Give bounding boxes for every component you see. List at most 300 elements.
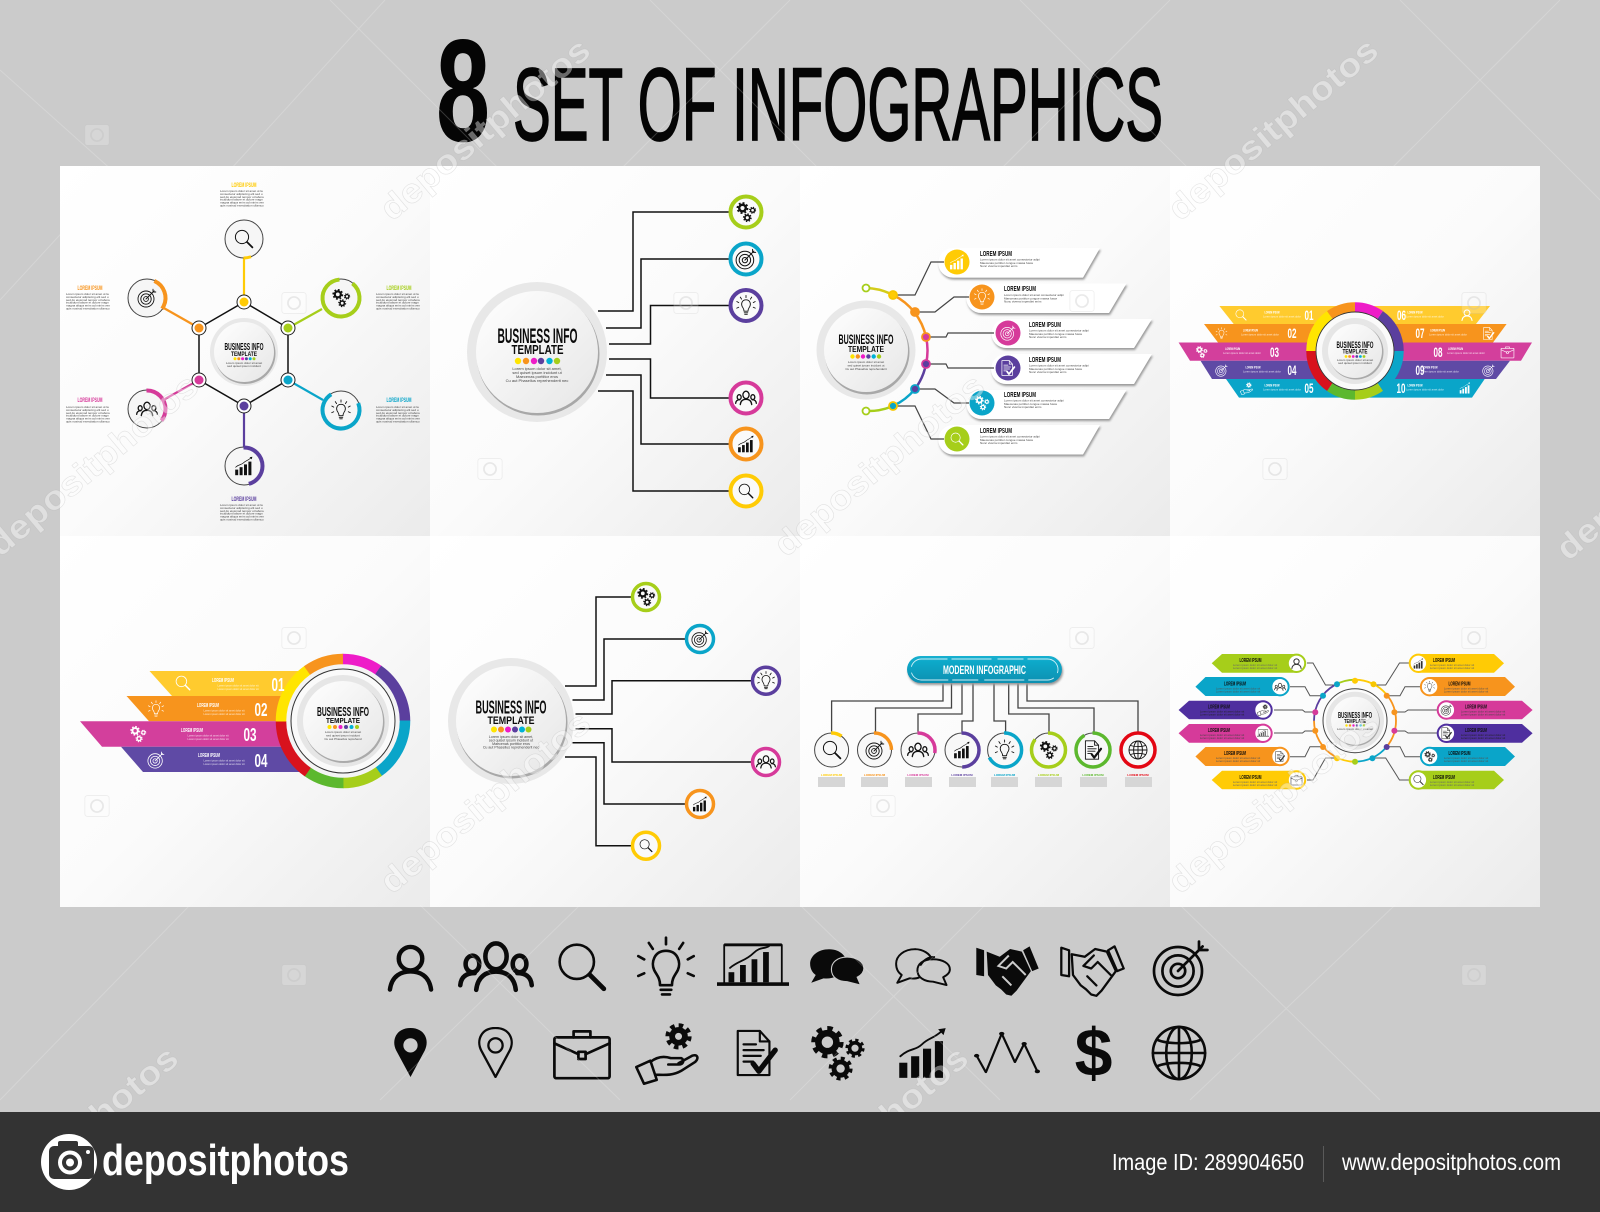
center ring: BUSINESS INFO (1338, 710, 1372, 720)
band numbers: 01 (1304, 307, 1314, 323)
icon: briefcase (554, 1031, 610, 1078)
node 8 globe: LOREM IPSUM (1127, 773, 1149, 777)
node 7 document (1076, 733, 1110, 787)
text block: top: magna aliqua enim ad minim ven (220, 201, 264, 205)
band captions: Lorem ipsum dolor sit amet dolor sit (217, 687, 259, 691)
band captions: Lorem ipsum dolor sit amet dolor (1223, 351, 1261, 355)
card 2 content: Nunc viverra imperdiet enim (1004, 300, 1042, 304)
left arrow 2 (1195, 677, 1289, 696)
card 4 content: Nunc viverra imperdiet enim (1029, 370, 1067, 374)
icon: bulb purple (730, 290, 762, 321)
colored bands (1179, 306, 1532, 398)
text block: lower right (376, 398, 420, 424)
band captions: Lorem ipsum dolor sit amet dolor sit (203, 708, 245, 712)
icon: document check (738, 1031, 775, 1075)
right arrow 2 (1421, 677, 1515, 696)
card 5 content: Lorem ipsum dolor sit amet consectetur adipi (1004, 398, 1064, 402)
text block: lower left: LOREM IPSUM (78, 398, 102, 404)
heading pill (907, 656, 1062, 683)
band labels: LOREM IPSUM (212, 678, 234, 684)
band labels: LOREM IPSUM (1264, 384, 1280, 388)
center ring: Lorem ipsum dolor sit amet (1337, 727, 1373, 731)
right arrow 4: Lorem ipsum dolor sit amet dolor sit (1461, 733, 1505, 737)
center badge: BUSINESS INFO (1336, 340, 1374, 351)
band labels: LOREM IPSUM (1422, 366, 1438, 370)
band numbers: 04 (254, 751, 268, 771)
card 5 content: Nunc viverra imperdiet enim (1004, 405, 1042, 409)
watermark overlay: depositphotos (373, 31, 598, 228)
icon: gears lime (730, 196, 762, 228)
node 4 chart (945, 733, 979, 787)
center badge: Cu aut Phasellus reprehend (324, 737, 362, 741)
left arrow 6: Lorem ipsum dolor sit amet dolor sit (1233, 780, 1277, 784)
card 6 content: LOREM IPSUM (980, 426, 1012, 435)
center badge: TEMPLATE (326, 716, 360, 725)
text block: bottom: quis nostrud exercitation ullamco (220, 518, 264, 522)
band numbers: 03 (1270, 344, 1279, 360)
title (436, 9, 1163, 172)
branch lines (832, 683, 1138, 732)
center badge: Lorem ipsum dolor sit amet (226, 361, 262, 365)
band captions: Lorem ipsum dolor sit amet dolor (1243, 370, 1281, 374)
text block: top: consectetur adipiscing elit sed u (220, 192, 263, 196)
band captions (187, 684, 259, 766)
card 2 content: Maecenas porttitor congue massa fusce (1004, 296, 1058, 300)
text block: upper right: Lorem ipsum dolor sit amet ut la (376, 292, 419, 296)
node 2 target (858, 733, 892, 787)
center badge: TEMPLATE (512, 343, 564, 357)
text block: bottom: magna aliqua enim ad minim ven (220, 515, 264, 519)
right arrow 4 (1438, 724, 1533, 743)
band captions: Lorem ipsum dolor sit amet dolor (1429, 332, 1467, 336)
node 2 target: LOREM IPSUM (864, 773, 886, 777)
center badge: sed quiset ipsum incidunt (227, 364, 261, 368)
text block: lower left: sed do eiusmod tempor ut labore (66, 411, 110, 415)
left arrow 4: Lorem ipsum dolor sit amet dolor sit (1200, 733, 1244, 737)
band captions: Lorem ipsum dolor sit amet dolor sit (203, 712, 245, 716)
center badge (448, 658, 574, 784)
card 4 content: Lorem ipsum dolor sit amet consectetur adipi (1029, 364, 1089, 368)
band icons (131, 676, 190, 768)
heading pill: MODERN INFOGRAPHIC (943, 663, 1026, 677)
center badge: TEMPLATE (231, 352, 257, 358)
left arrow 4: LOREM IPSUM (1208, 728, 1230, 734)
icon: gears lime (632, 584, 660, 610)
band numbers: 05 (1304, 380, 1314, 396)
band numbers (1270, 307, 1443, 396)
center badge: BUSINESS INFO (498, 325, 578, 348)
center badge: Maecenas porttitor eros (516, 374, 558, 379)
card 5 content: Maecenas porttitor congue massa fusce (1004, 402, 1058, 406)
watermark overlay: depositphotos (373, 704, 598, 901)
icon: handshake outline (1061, 946, 1124, 996)
band labels: LOREM IPSUM (1448, 347, 1463, 351)
panel backgrounds (60, 166, 1540, 907)
band numbers: 01 (272, 675, 284, 695)
node: people (128, 390, 166, 428)
node: target (122, 273, 172, 323)
hexagon nodes (192, 295, 295, 413)
text block: upper left (66, 286, 110, 310)
right arrow 6: Lorem ipsum dolor sit amet dolor sit (1430, 780, 1474, 784)
left arrow 5: LOREM IPSUM (1224, 751, 1246, 757)
left arrow 6 (1212, 771, 1305, 789)
right arrow 6: Lorem ipsum dolor sit amet dolor sit (1430, 783, 1474, 787)
text block: lower left: incididunt labore et dolore magn (66, 414, 109, 418)
panel: hexagon infographic (66, 183, 420, 522)
icon: search yellow (730, 476, 762, 506)
text block: bottom: consectetur adipiscing elit sed u (220, 506, 263, 510)
arc nodes (862, 284, 930, 414)
band captions: Lorem ipsum dolor sit amet dolor (1263, 314, 1301, 318)
left arrow 3: LOREM IPSUM (1208, 704, 1230, 710)
center ring: TEMPLATE (1344, 719, 1367, 725)
cards (938, 248, 1152, 454)
band captions: Lorem ipsum dolor sit amet dolor (1447, 351, 1485, 355)
node 6 gears (1032, 733, 1066, 787)
band labels: LOREM IPSUM (1408, 310, 1422, 314)
band numbers: 08 (1434, 344, 1443, 360)
icon: pin solid (394, 1028, 427, 1077)
watermark overlay: depositphotos (1161, 31, 1386, 228)
text block: bottom: sed do eiusmod tempor ut labore (220, 509, 264, 513)
right arrow 1: LOREM IPSUM (1433, 658, 1455, 664)
icon: bulb purple (752, 667, 780, 694)
band labels: LOREM IPSUM (197, 703, 219, 709)
card 1 content: LOREM IPSUM (980, 249, 1012, 258)
node 7 document: LOREM IPSUM (1082, 773, 1104, 777)
icon: target cyan (730, 244, 762, 274)
card 3 content: Maecenas porttitor congue massa fusce (1029, 332, 1083, 336)
band captions: Lorem ipsum dolor sit amet dolor (1406, 388, 1444, 392)
right arrow 3: Lorem ipsum dolor sit amet dolor sit (1461, 710, 1505, 714)
right arrow 3: LOREM IPSUM (1465, 704, 1487, 710)
right arrow 1 (1410, 654, 1504, 673)
band numbers: 10 (1396, 380, 1406, 396)
watermark overlay: depositphotos (1161, 704, 1386, 901)
left arrow 1: Lorem ipsum dolor sit amet dolor sit (1233, 663, 1277, 667)
segmented ring (1294, 290, 1416, 412)
text block: upper right: consectetur adipiscing elit sed u (376, 295, 419, 299)
text block: top: Lorem ipsum dolor sit amet ut la (220, 189, 263, 193)
text block: lower left: magna aliqua enim ad minim ven (66, 417, 110, 421)
panel: twelve arrows (1179, 654, 1533, 789)
node: search (220, 215, 268, 263)
left arrow 2: LOREM IPSUM (1224, 682, 1246, 688)
icon: target (1154, 942, 1207, 995)
band numbers: 07 (1416, 325, 1425, 341)
right arrow 3: Lorem ipsum dolor sit amet dolor sit (1461, 712, 1505, 716)
text block: upper left: incididunt labore et dolore magn (66, 301, 109, 305)
text block: upper right: sed do eiusmod tempor ut labore (376, 298, 420, 302)
center badge: Cu aut Phasellus reprehenderit nec (483, 746, 539, 750)
text block: lower right: LOREM IPSUM (386, 398, 412, 404)
branch lines (565, 597, 751, 846)
node 3 people (901, 733, 935, 787)
right arrow 5 (1421, 747, 1515, 766)
icon: chat solid (810, 949, 864, 985)
text block: lower left: quis nostrud exercitation ullamco (66, 420, 110, 424)
card 3 content: Nunc viverra imperdiet enim (1029, 335, 1067, 339)
text block: lower right: sed do eiusmod tempor ut labore (376, 411, 420, 415)
band numbers: 02 (1288, 325, 1297, 341)
center badge: sed quiset ipsum incidunt (326, 734, 360, 738)
text block: top: LOREM IPSUM (232, 183, 256, 189)
node: bulb (317, 386, 365, 434)
right arrow 1: Lorem ipsum dolor sit amet dolor sit (1430, 663, 1474, 667)
icon: globe (1153, 1027, 1205, 1079)
band captions: Lorem ipsum dolor sit amet dolor sit (203, 762, 245, 766)
band numbers: 06 (1397, 307, 1406, 323)
panel: six branch tree (467, 196, 762, 506)
segmented ring (257, 635, 429, 807)
icon: pin outline (479, 1028, 512, 1077)
image id: Image ID: 289904650 (1112, 1149, 1304, 1175)
logo mark (41, 1134, 97, 1190)
left arrow 2: Lorem ipsum dolor sit amet dolor sit (1216, 686, 1260, 690)
card 6 content: Nunc viverra imperdiet enim (980, 441, 1018, 445)
branch lines (598, 212, 729, 491)
left arrow 3 (1179, 701, 1272, 719)
text block: upper left: consectetur adipiscing elit sed u (66, 295, 109, 299)
text block: bottom: Lorem ipsum dolor sit amet ut la (220, 503, 263, 507)
right arrow 5: Lorem ipsum dolor sit amet dolor sit (1444, 756, 1488, 760)
center badge: Maecenas porttitor eros (492, 742, 530, 746)
center badge (1316, 312, 1394, 390)
center badge: sed quiset ipsum incidunt ut (847, 364, 885, 368)
band labels: LOREM IPSUM (1243, 328, 1258, 332)
text block: upper left: Lorem ipsum dolor sit amet ut la (66, 292, 109, 296)
center badge: sed quiset ipsum incidunt ut (512, 370, 563, 375)
band labels: LOREM IPSUM (1408, 384, 1422, 388)
text block: upper left: magna aliqua enim ad minim ven (66, 304, 110, 308)
connector spokes (162, 256, 323, 448)
band labels: LOREM IPSUM (1225, 347, 1240, 351)
center badge: TEMPLATE (1342, 350, 1368, 356)
left arrow 5: Lorem ipsum dolor sit amet dolor sit (1216, 759, 1260, 763)
panel: four band wheel (80, 635, 429, 807)
text block: lower right: quis nostrud exercitation ullamco (376, 420, 420, 424)
center badge: TEMPLATE (848, 344, 884, 354)
right arrow 2: Lorem ipsum dolor sit amet dolor sit (1444, 690, 1488, 694)
band numbers: 04 (1288, 362, 1297, 378)
left arrow 6: Lorem ipsum dolor sit amet dolor sit (1233, 783, 1277, 787)
text block: lower left: consectetur adipiscing elit sed u (66, 408, 109, 412)
right arrow 4: LOREM IPSUM (1465, 728, 1487, 734)
band labels (1225, 310, 1463, 388)
text block: upper right: magna aliqua enim ad minim ven (376, 304, 420, 308)
icon row 1 (390, 938, 1207, 996)
panel: staggered tree (448, 584, 780, 859)
card 3 content: Lorem ipsum dolor sit amet consectetur adipi (1029, 328, 1089, 332)
band labels (181, 678, 234, 759)
icon: handshake solid (976, 946, 1039, 996)
node 8 globe (1121, 733, 1155, 787)
band captions: Lorem ipsum dolor sit amet dolor sit (203, 758, 245, 762)
right arrow 5: Lorem ipsum dolor sit amet dolor sit (1444, 759, 1488, 763)
band captions: Lorem ipsum dolor sit amet dolor sit (187, 737, 229, 741)
colored arc (866, 288, 928, 411)
node: gears (315, 272, 367, 324)
node 5 bulb: LOREM IPSUM (994, 773, 1016, 777)
left arrow 5 (1195, 747, 1289, 766)
left arrow 1 (1212, 654, 1305, 673)
text block: lower right: incididunt labore et dolore magn (376, 414, 419, 418)
icon: search yellow (632, 832, 660, 859)
band captions: Lorem ipsum dolor sit amet dolor (1406, 314, 1444, 318)
text block: lower right: magna aliqua enim ad minim ven (376, 417, 420, 421)
text block: lower right: consectetur adipiscing elit sed u (376, 408, 419, 412)
card 6 content: Maecenas porttitor congue massa fusce (980, 438, 1034, 442)
center badge: Cu aut Phasellus reprehenderit nec (506, 378, 568, 383)
card 2 content: Lorem ipsum dolor sit amet consectetur adipi (1004, 293, 1064, 297)
footer bar (0, 1112, 1600, 1212)
center badge: BUSINESS INFO (838, 332, 894, 347)
connectors (1274, 663, 1437, 780)
card 5 content: LOREM IPSUM (1004, 390, 1036, 399)
center badge: sed quiset ipsum incidunt ut (489, 738, 533, 742)
text block: bottom: incididunt labore et dolore magn (220, 512, 263, 516)
text block: lower left: Lorem ipsum dolor sit amet ut la (66, 405, 109, 409)
band labels: LOREM IPSUM (198, 753, 220, 759)
center badge: Lorem ipsum dolor sit amet, (489, 735, 533, 739)
band labels: LOREM IPSUM (1264, 310, 1280, 314)
band icons (1196, 310, 1514, 395)
left arrow 1: Lorem ipsum dolor sit amet dolor sit (1233, 666, 1277, 670)
right arrow 5: LOREM IPSUM (1448, 751, 1470, 757)
panel: modern infographic (815, 656, 1155, 787)
band captions: Lorem ipsum dolor sit amet dolor sit (217, 684, 259, 688)
band captions: Lorem ipsum dolor sit amet dolor sit (187, 734, 229, 738)
band captions: Lorem ipsum dolor sit amet dolor (1263, 388, 1301, 392)
text block: upper right: incididunt labore et dolore magn (376, 301, 419, 305)
band numbers: 09 (1416, 362, 1425, 378)
text block: upper left: LOREM IPSUM (78, 286, 102, 292)
icon: gears (814, 1028, 863, 1079)
hexagon (199, 302, 288, 406)
center badge: Lorem ipsum dolor sit amet (325, 730, 361, 734)
band captions: Lorem ipsum dolor sit amet dolor (1421, 370, 1459, 374)
left arrow 4: Lorem ipsum dolor sit amet dolor sit (1200, 736, 1244, 740)
right arrow 6: LOREM IPSUM (1433, 775, 1455, 781)
center badge (210, 318, 278, 386)
right arrow 1: Lorem ipsum dolor sit amet dolor sit (1430, 666, 1474, 670)
center badge: Lorem ipsum dolor sit amet, (512, 366, 562, 371)
left arrow 4 (1179, 724, 1272, 743)
left arrow 3: Lorem ipsum dolor sit amet dolor sit (1200, 712, 1244, 716)
center badge: TEMPLATE (488, 715, 534, 727)
center badge (467, 282, 607, 422)
center badge: Lorem ipsum dolor sit amet (848, 360, 884, 364)
node 1 search (815, 733, 849, 787)
center badge: BUSINESS INFO (224, 342, 264, 353)
icon: hand with gear (636, 1025, 697, 1084)
colored bands (80, 671, 310, 772)
text block: upper right: quis nostrud exercitation ullamco (376, 306, 420, 310)
icon: chart orange (730, 428, 762, 460)
footer divider (1323, 1146, 1324, 1182)
center badge: Cu aut Phasellus reprehenderit (845, 367, 887, 371)
card 1 content: Nunc viverra imperdiet enim (980, 264, 1018, 268)
left arrow 5: Lorem ipsum dolor sit amet dolor sit (1216, 756, 1260, 760)
card 2 content (970, 284, 1064, 310)
right arrow 4: Lorem ipsum dolor sit amet dolor sit (1461, 736, 1505, 740)
band numbers (244, 675, 284, 771)
card 3 content (996, 320, 1089, 346)
card 1 content (944, 249, 1040, 274)
band captions (1223, 314, 1485, 392)
ring nodes (1312, 678, 1397, 765)
band captions: Lorem ipsum dolor sit amet dolor (1241, 332, 1279, 336)
text block: upper right (376, 286, 420, 310)
icon: growth chart (899, 1028, 946, 1078)
icon: dollar: $ (1075, 1015, 1112, 1091)
icon: people pink (730, 382, 762, 414)
center badge: sed quiset ipsum incidunt (1338, 361, 1372, 365)
right arrow 3 (1438, 701, 1533, 719)
right arrow 2: Lorem ipsum dolor sit amet dolor sit (1444, 686, 1488, 690)
icon: magnifier (560, 945, 604, 989)
right arrow 6 (1410, 771, 1504, 789)
icon: laptop chart (717, 943, 789, 986)
center badge: BUSINESS INFO (317, 704, 369, 719)
icon row 2 (394, 1015, 1205, 1091)
icon: chat outline (896, 949, 950, 985)
node: chart (225, 447, 263, 485)
icon: people pink (752, 748, 780, 776)
panel: ten colored bands (1179, 290, 1532, 412)
icon: light bulb (638, 938, 694, 994)
center ring (1297, 663, 1413, 778)
text block: upper left: quis nostrud exercitation ullamco (66, 306, 110, 310)
icon: person (390, 947, 431, 990)
left arrow 3: Lorem ipsum dolor sit amet dolor sit (1200, 710, 1244, 714)
card 4 content (996, 355, 1089, 380)
band labels: LOREM IPSUM (1246, 366, 1260, 370)
node 5 bulb (988, 733, 1022, 787)
title: 8 (436, 9, 490, 172)
center badge: BUSINESS INFO (476, 698, 546, 718)
icon: chart orange (686, 790, 714, 818)
card 2 content: LOREM IPSUM (1004, 284, 1036, 293)
center badge (291, 669, 395, 773)
left arrow 1: LOREM IPSUM (1240, 658, 1262, 664)
node 4 chart: LOREM IPSUM (951, 773, 973, 777)
card 1 content: Maecenas porttitor congue massa fusce (980, 261, 1034, 265)
card 4 content: LOREM IPSUM (1029, 355, 1061, 364)
band numbers: 03 (244, 725, 256, 745)
text block: lower left (66, 398, 110, 424)
watermark overlay: depositphotos (767, 367, 992, 564)
text block: top (220, 183, 264, 208)
card 6 content (944, 426, 1040, 452)
card 3 content: LOREM IPSUM (1029, 320, 1061, 329)
text block: top: incididunt labore et dolore magn (220, 198, 263, 202)
text block: bottom: LOREM IPSUM (232, 497, 256, 503)
card 5 content (970, 390, 1064, 416)
text block: lower right: Lorem ipsum dolor sit amet ut la (376, 405, 419, 409)
icon: people (460, 943, 532, 990)
text block: top: sed do eiusmod tempor ut labore (220, 195, 264, 199)
text block: upper left: sed do eiusmod tempor ut labore (66, 298, 110, 302)
text block: bottom (220, 497, 264, 522)
left arrow 2: Lorem ipsum dolor sit amet dolor sit (1216, 690, 1260, 694)
card 1 content: Lorem ipsum dolor sit amet consectetur adipi (980, 258, 1040, 262)
center badge (816, 300, 916, 400)
node 3 people: LOREM IPSUM (907, 773, 929, 777)
icon: zigzag line (974, 1032, 1040, 1073)
band labels: LOREM IPSUM (181, 728, 203, 734)
